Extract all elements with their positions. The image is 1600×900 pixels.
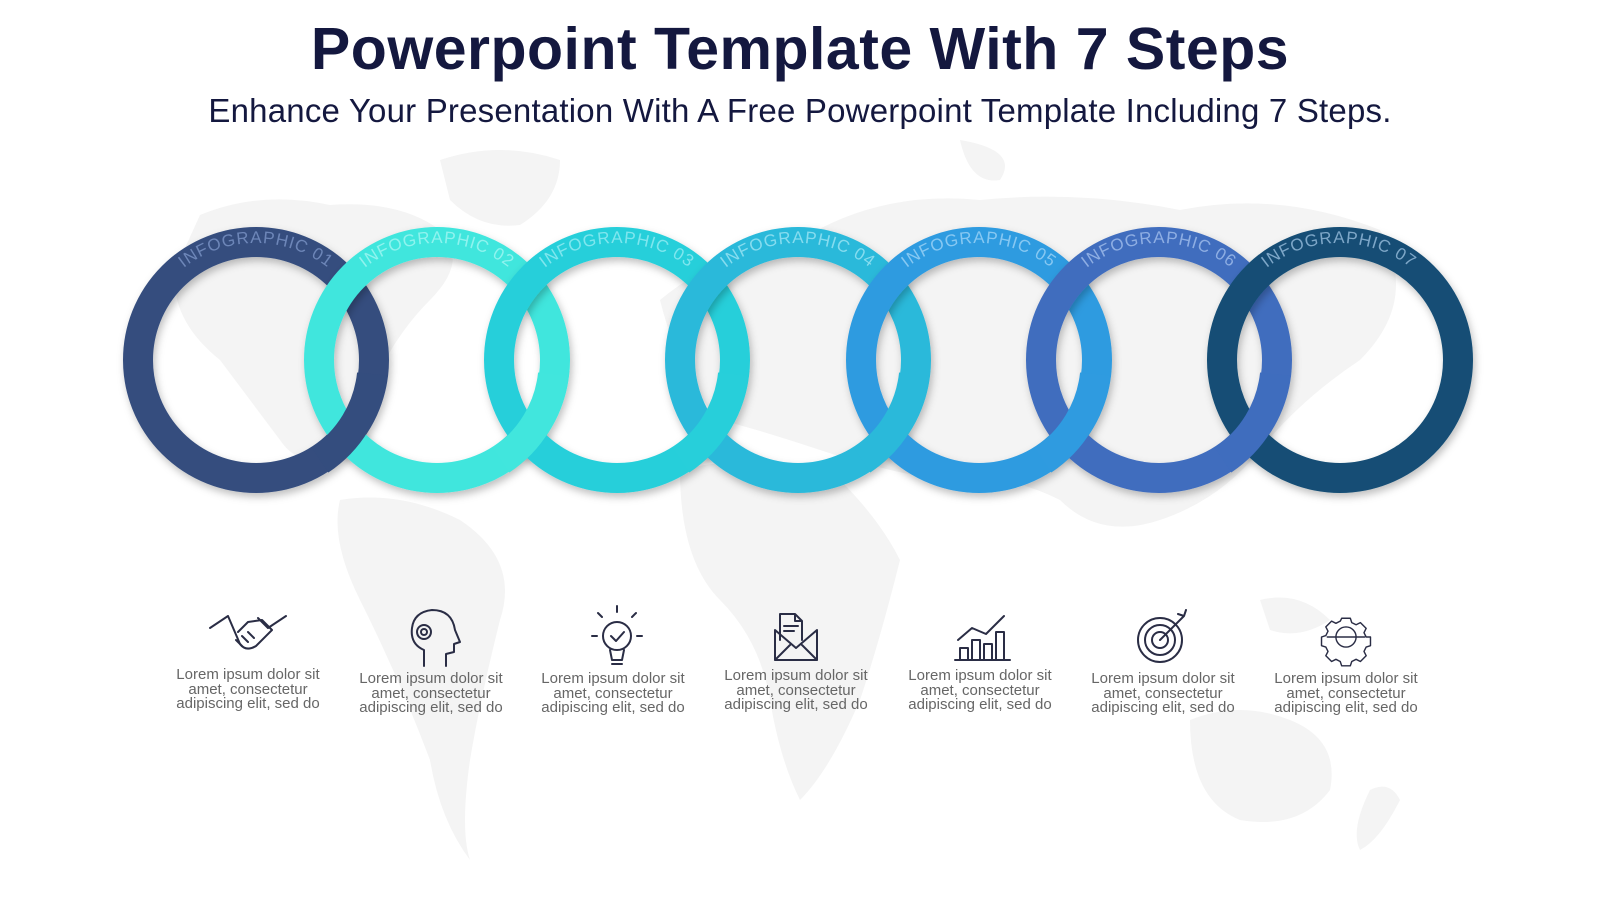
icon: gear [1322,618,1370,666]
text: step 6 [1091,670,1235,716]
text: step 1: Lorem ipsum dolor sit [176,666,320,683]
icon: lightbulb [592,606,642,664]
interlock overlaps [320,374,1275,460]
text: step 5: adipiscing elit, sed do [908,696,1052,713]
text: step 3: amet, consectetur [553,684,673,702]
text: step 2 [359,670,503,716]
ring 06 [1024,227,1298,501]
ring 05: INFOGRAPHIC 05 [901,231,1056,267]
text: step 7: amet, consectetur [1286,684,1406,702]
icon: target [1138,610,1186,662]
text: step 5 [908,667,1052,713]
text: step 2: amet, consectetur [371,684,491,702]
ring 04 [663,226,937,502]
text: step 7: adipiscing elit, sed do [1274,699,1418,716]
icon: bar chart [955,616,1010,660]
text: step 7 [1274,670,1418,716]
ring 01 [121,227,395,501]
ring 04: INFOGRAPHIC 04 [720,231,874,267]
ring 07: INFOGRAPHIC 07 [1261,231,1417,267]
text: step 4: Lorem ipsum dolor sit [724,667,868,684]
text: step 5: Lorem ipsum dolor sit [908,667,1052,684]
text: step 6: amet, consectetur [1103,684,1223,702]
ring 07 [1205,226,1479,502]
ring 05 [844,227,1118,502]
icon: handshake [210,616,286,649]
text: step 2: adipiscing elit, sed do [359,699,503,716]
text: step 4: amet, consectetur [736,682,856,698]
text: step 7: Lorem ipsum dolor sit [1274,670,1418,687]
text: step 5: amet, consectetur [920,682,1040,698]
text: step 1 [176,666,320,712]
text: step 6: adipiscing elit, sed do [1091,699,1235,716]
subtitle: Enhance Your Presentation With A Free Powerpoint Template Including 7 Steps. [208,92,1392,129]
ring 03: INFOGRAPHIC 03 [539,231,694,267]
ring 02 [302,226,576,502]
icon: head gear [412,610,460,666]
text: step 1: adipiscing elit, sed do [176,695,320,712]
text: step 3: Lorem ipsum dolor sit [541,670,685,687]
text: step 6: Lorem ipsum dolor sit [1091,670,1235,687]
ring 03 [482,227,756,502]
ring 06: INFOGRAPHIC 06 [1081,231,1236,267]
text: step 2: Lorem ipsum dolor sit [359,670,503,687]
icon: mail [775,614,817,660]
ring 01: INFOGRAPHIC 01 [178,231,332,267]
text: step 3: adipiscing elit, sed do [541,699,685,716]
text: step 4: adipiscing elit, sed do [724,696,868,713]
text: step 4 [724,667,868,713]
title: Powerpoint Template With 7 Steps [311,16,1289,82]
text: step 1: amet, consectetur [188,680,308,698]
ring 02: INFOGRAPHIC 02 [359,231,514,267]
text: step 3 [541,670,685,716]
